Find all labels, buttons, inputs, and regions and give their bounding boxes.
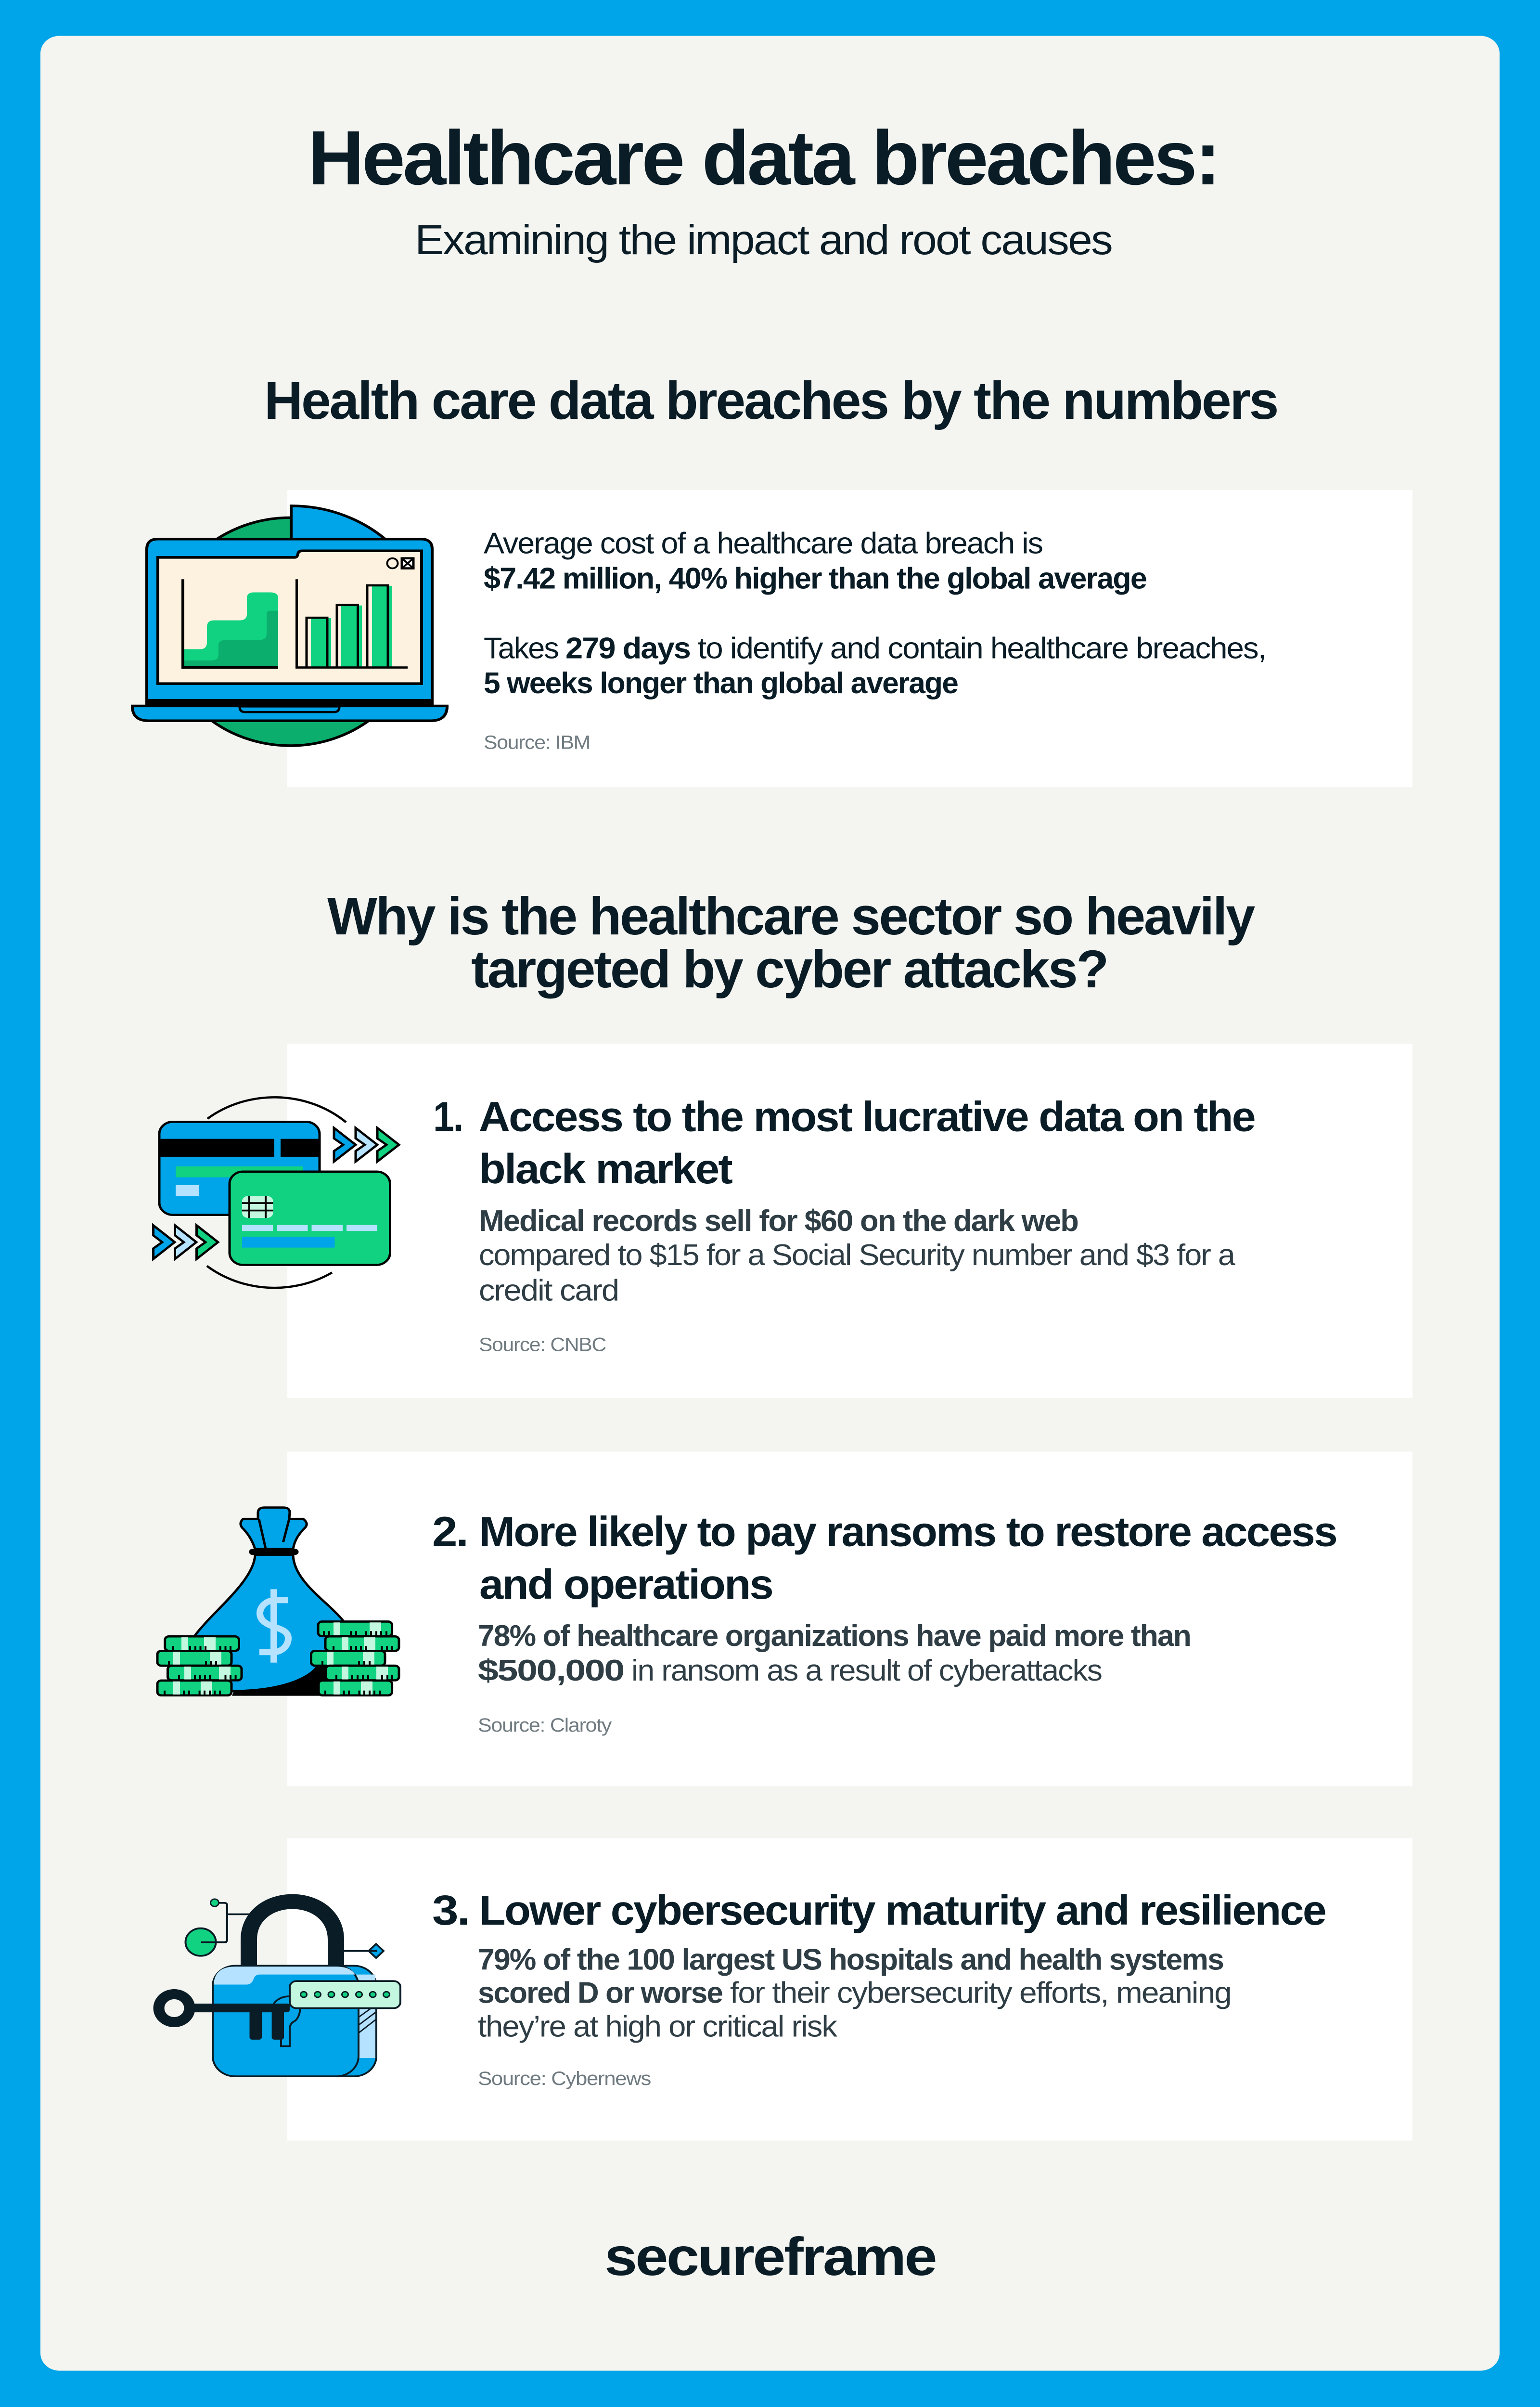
icon: padlock and key: [159, 1899, 400, 2076]
panel: reason 2: [157, 1451, 1412, 1786]
source: CNBC: Source: CNBC: [479, 1334, 606, 1355]
reason body 2: 78% of healthcare organizations have paid more than: [478, 1619, 1191, 1653]
reason heading 1: Access to the most lucrative data on the: [479, 1093, 1255, 1140]
reason body 1: credit card: [479, 1273, 618, 1307]
source: IBM: Source: IBM: [484, 731, 590, 753]
reason body 3: scored D or worse: [478, 1976, 722, 2009]
reason heading 2: and operations: [479, 1561, 772, 1608]
panel: reason 1: [153, 1044, 1412, 1398]
stat: days to identify: 279 days: [565, 631, 690, 665]
reason body 2: [478, 1619, 1191, 1687]
source: Cybernews: Source: Cybernews: [478, 2068, 651, 2089]
reason number 2: 2.: [432, 1509, 467, 1555]
reason body 3: [478, 1943, 1231, 2043]
reason number 1: 1.: [433, 1093, 462, 1140]
reason heading 2: [479, 1509, 1336, 1608]
heading: why targeted: [327, 886, 1255, 999]
stat: average cost: $7.42 million, 40% higher than the global average: [484, 561, 1146, 595]
heading: by the numbers: Health care data breaches by the numbers: [264, 371, 1277, 430]
reason heading 3: Lower cybersecurity maturity and resilience: [479, 1887, 1325, 1934]
logo: secureframe: secureframe: [604, 2226, 936, 2287]
stat: days to identify: Takes: [484, 631, 558, 665]
panel background: [287, 490, 1412, 787]
reason heading 1: [479, 1093, 1255, 1192]
reason body 3: for their cybersecurity efforts, meaning: [730, 1976, 1231, 2009]
bills: right stack: [311, 1621, 399, 1695]
icon: credit cards: [153, 1097, 399, 1288]
stat: average cost: [484, 527, 1146, 595]
reason body 2: in ransom as a result of cyberattacks: [631, 1654, 1102, 1687]
stat: days to identify: to identify and contain healthcare breaches,: [698, 631, 1266, 665]
panel: reason 3: [159, 1838, 1412, 2140]
stat: days to identify: [484, 631, 1266, 699]
bills: left stack: [157, 1636, 242, 1695]
source: Claroty: Source: Claroty: [478, 1714, 612, 1736]
icon: laptop with charts: [132, 506, 447, 746]
reason number 3: 3.: [432, 1887, 469, 1934]
reason heading 1: black market: [479, 1146, 732, 1192]
heading: why targeted: targeted by cyber attacks?: [471, 939, 1107, 999]
panel background: [287, 1044, 1412, 1398]
stat: average cost: Average cost of a healthcare data breach is: [484, 527, 1042, 560]
reason body 1: Medical records sell for $60 on the dark web: [479, 1204, 1078, 1237]
icon: money bag: [157, 1508, 399, 1696]
reason body 3: 79% of the 100 largest US hospitals and health systems: [478, 1943, 1223, 1976]
title: Healthcare data breaches:: [308, 115, 1219, 201]
panel background: [287, 1451, 1412, 1786]
heading: why targeted: Why is the healthcare sector so heavily: [327, 886, 1255, 946]
stat: days to identify: 5 weeks longer than global average: [484, 666, 958, 699]
panel: by the numbers: [132, 490, 1412, 787]
reason body 3: they’re at high or critical risk: [478, 2009, 837, 2043]
panel background: [287, 1838, 1412, 2140]
reason body 1: compared to $15 for a Social Security number and $3 for a: [479, 1238, 1236, 1271]
reason heading 2: More likely to pay ransoms to restore access: [479, 1509, 1336, 1555]
subtitle: Examining the impact and root causes: [415, 217, 1112, 263]
reason body 2: $500,000: [478, 1654, 624, 1687]
reason body 1: [479, 1204, 1236, 1307]
